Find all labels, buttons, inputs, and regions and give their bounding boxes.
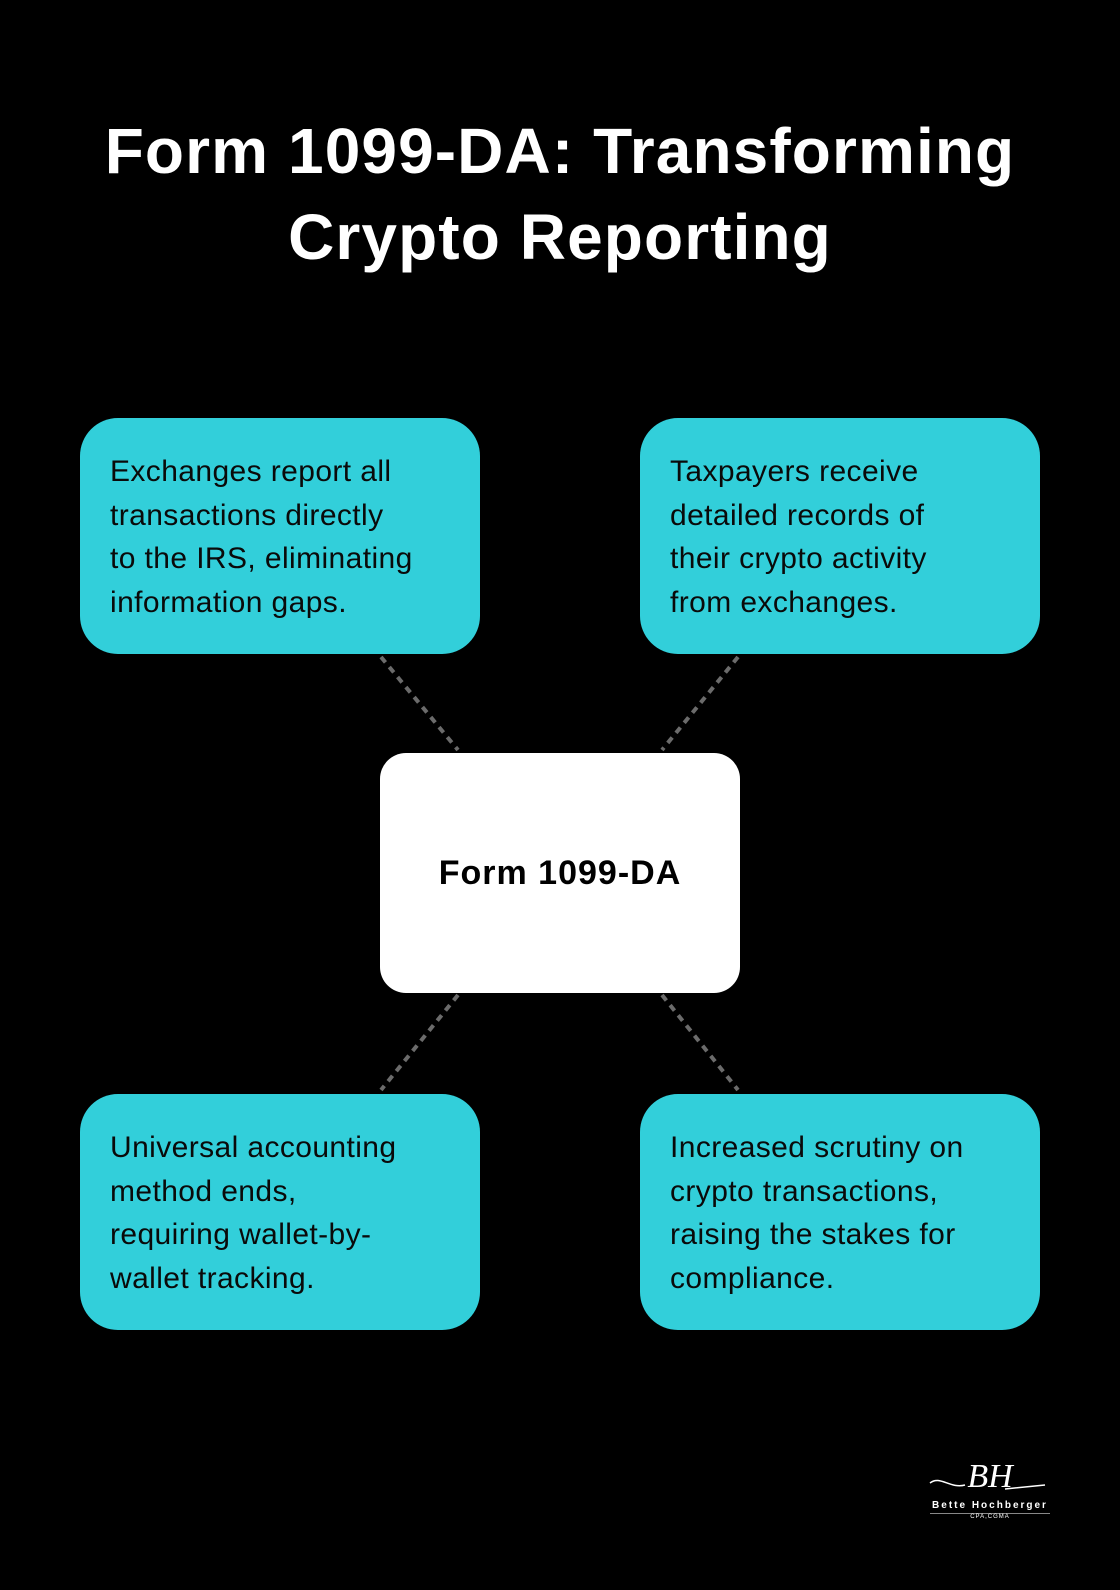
logo [930,1458,1050,1520]
box: taxpayers receive: Taxpayers receive [670,455,919,488]
logo: CPA,CGMA [970,1514,1010,1520]
logo: BH [967,1458,1015,1495]
box: exchanges report: information gaps. [110,586,347,618]
title: Crypto Reporting [288,201,832,273]
box: exchanges report [80,418,480,654]
box: increased scrutiny [640,1094,1040,1330]
box: increased scrutiny: crypto transactions, [670,1174,938,1208]
box: exchanges report: Exchanges report all [110,455,392,488]
box: taxpayers receive [640,418,1040,654]
box: universal accounting: Universal accounting [110,1131,396,1164]
center box [380,753,740,993]
box: universal accounting: requiring wallet-by- [110,1218,371,1251]
box: increased scrutiny: raising the stakes for [670,1218,956,1251]
title: Form 1099-DA: Transforming [105,115,1015,187]
title [105,115,1015,273]
box: universal accounting: wallet tracking. [110,1262,315,1294]
box: universal accounting [80,1094,480,1330]
box: taxpayers receive: from exchanges. [670,586,898,618]
center box: Form 1099-DA [439,854,681,892]
box: exchanges report: to the IRS, eliminating [110,542,413,575]
box: universal accounting: method ends, [110,1174,297,1208]
box: increased scrutiny: compliance. [670,1262,834,1294]
box: taxpayers receive: detailed records of [670,498,924,532]
box: taxpayers receive: their crypto activity [670,542,927,575]
box: exchanges report: transactions directly [110,498,384,532]
logo: Bette Hochberger [932,1500,1048,1511]
box: increased scrutiny: Increased scrutiny on [670,1131,964,1164]
